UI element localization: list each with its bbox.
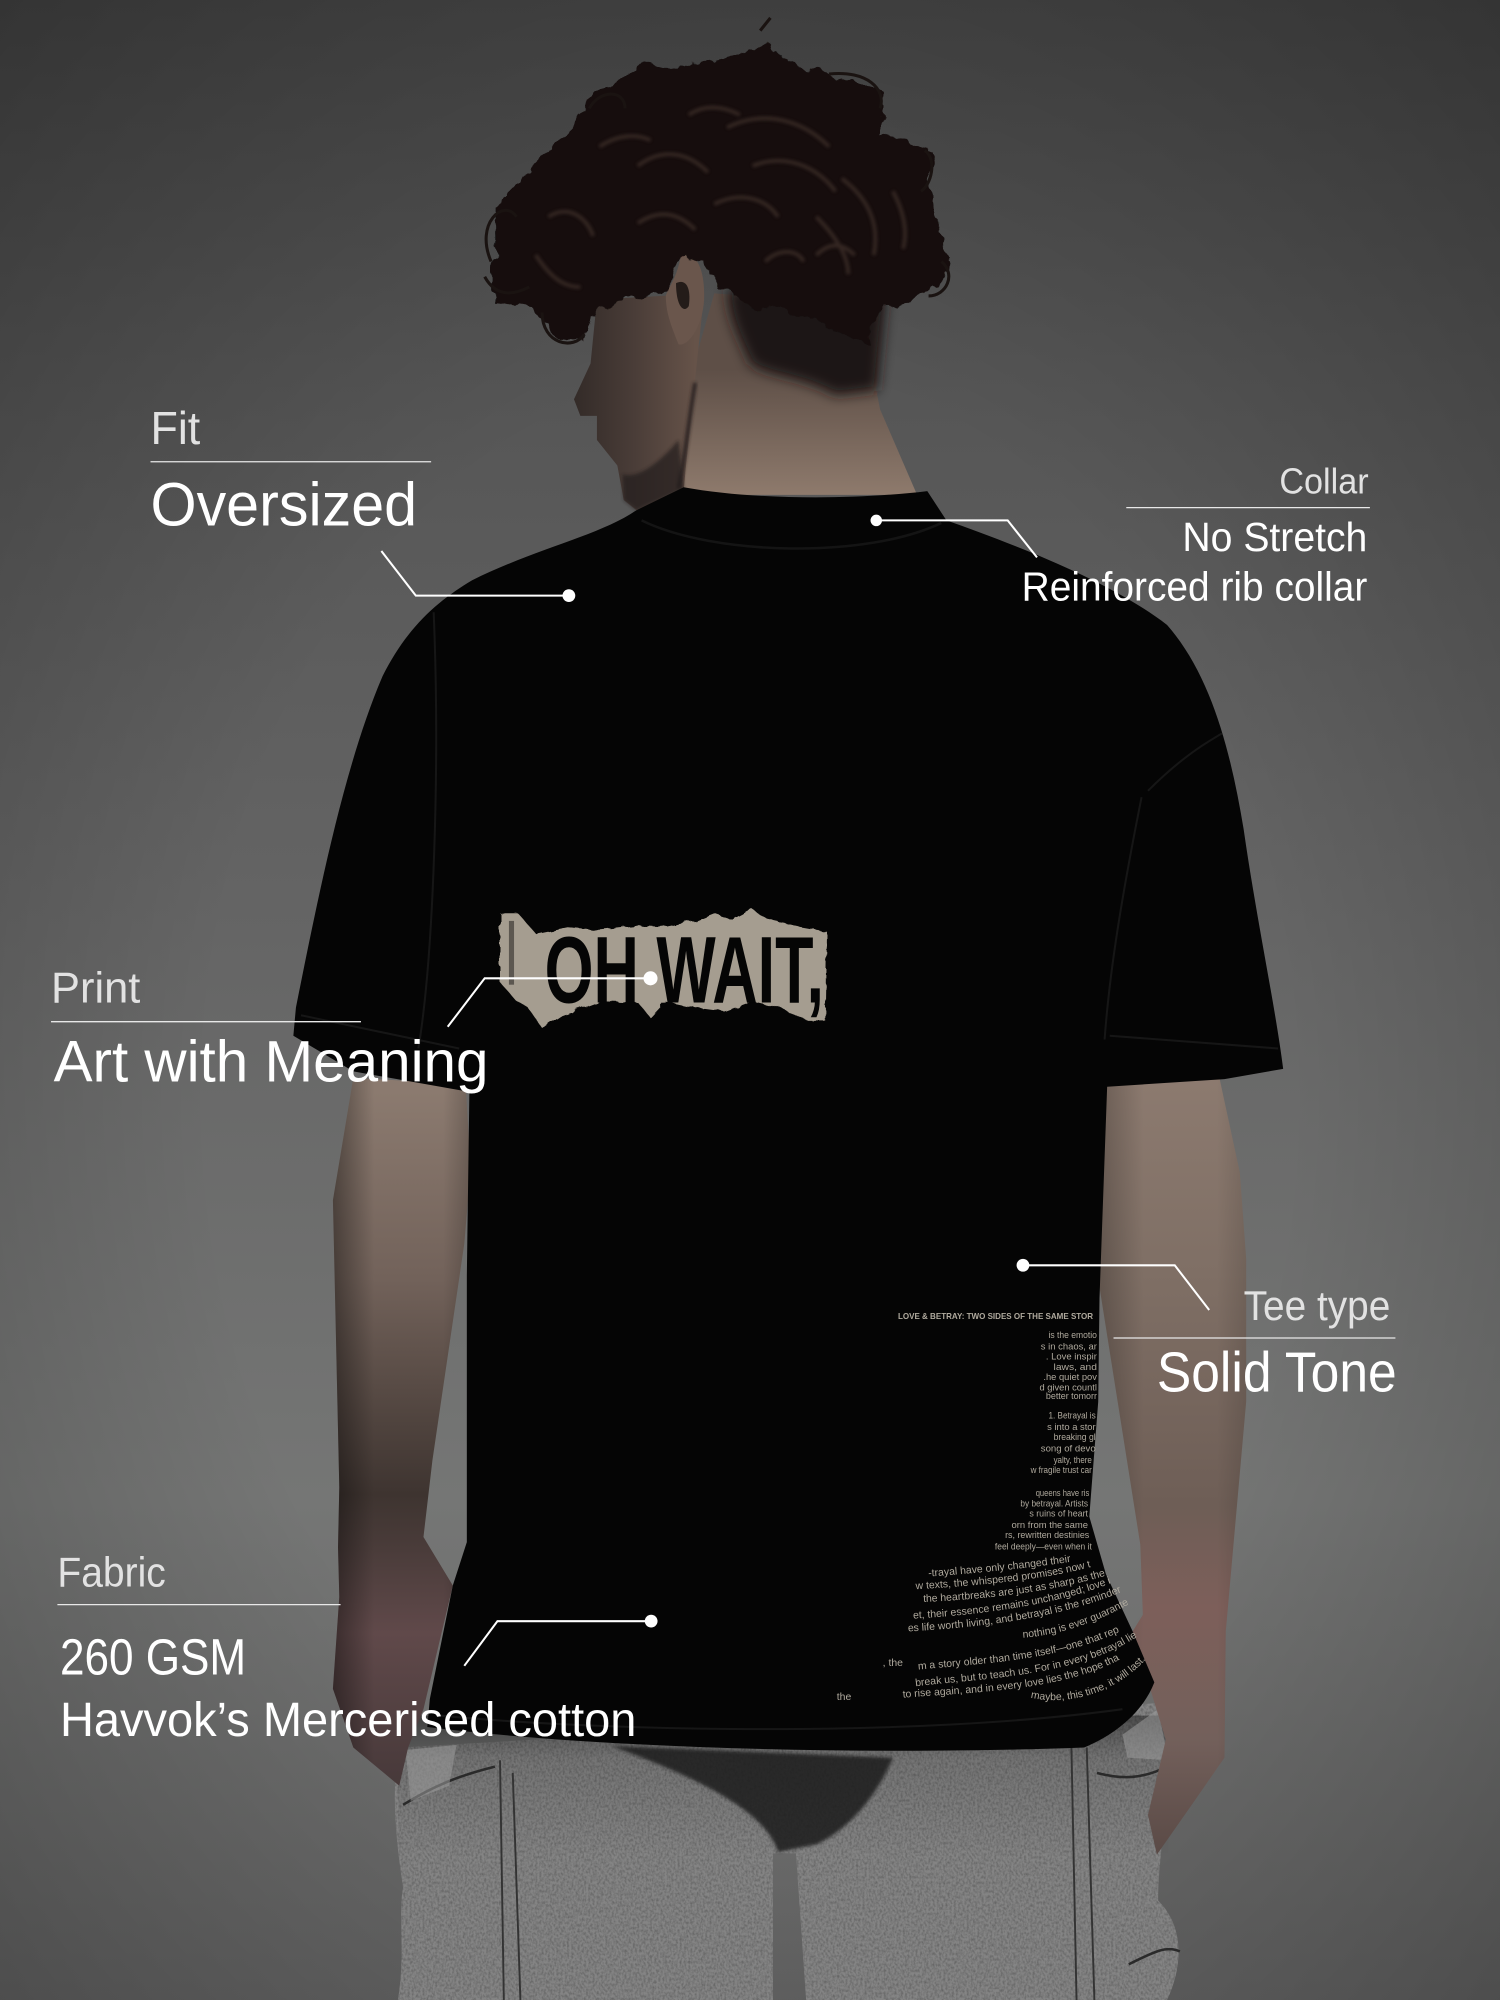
print: side story text: better tomorr — [1046, 1391, 1097, 1401]
left arm — [333, 1078, 471, 1786]
connector: fabric — [464, 1615, 658, 1666]
print: side story text — [836, 1312, 1145, 1703]
print: side story text: to rise again, and in every love lies the hope tha — [902, 1656, 1120, 1698]
print: torn paper "OH WAIT," — [500, 909, 827, 1028]
print: side story text: the heartbreaks are just as sharp as they — [923, 1571, 1104, 1602]
print: side story text: nothing is ever guarante — [1023, 1600, 1128, 1638]
print: side story text: es life worth living, and betrayal is the reminder — [908, 1587, 1120, 1632]
print: side story text: is the emotio — [1048, 1330, 1097, 1340]
print: side story text: .he quiet pov — [1043, 1372, 1097, 1382]
connector: collar — [871, 515, 1037, 557]
print: side story text: d given countl — [1040, 1382, 1097, 1392]
print: side story text: LOVE & BETRAY: TWO SIDES OF THE SAME STOR — [898, 1312, 1093, 1321]
print: side story text: queens have ris — [1036, 1488, 1090, 1498]
print: side story text: , the — [883, 1658, 903, 1669]
print: side story text: rs, rewritten destinies — [1005, 1530, 1090, 1540]
label: tee type: Tee type — [1244, 1282, 1390, 1329]
print: side story text: s ruins of heart — [1029, 1509, 1089, 1519]
print: side story text: breaking gl — [1054, 1432, 1096, 1442]
undercut hair — [727, 287, 886, 395]
print: side story text: laws, and — [1054, 1362, 1097, 1372]
connector: tee type — [1017, 1259, 1209, 1310]
callout: fit — [151, 402, 575, 602]
print: side story text: orn from the same — [1011, 1520, 1088, 1530]
t-shirt — [293, 487, 1283, 1751]
label: collar: Collar — [1279, 462, 1369, 502]
print: side story text: song of devo — [1041, 1444, 1096, 1454]
value: reinforced rib collar: Reinforced rib collar — [1022, 564, 1367, 610]
print: side story text: w texts, the whispered promises now t — [915, 1560, 1091, 1590]
value: art with meaning: Art with Meaning — [54, 1030, 489, 1095]
print: side story text: 1. Betrayal is — [1048, 1410, 1096, 1420]
right arm — [1099, 1078, 1246, 1855]
callout: tee type — [1017, 1259, 1397, 1404]
callout: collar — [871, 462, 1370, 610]
trousers — [395, 1703, 1180, 2000]
neck and face — [574, 254, 917, 510]
print: side story text: maybe, this time, it will last. — [1031, 1658, 1145, 1702]
print: side story text: yalty, there — [1054, 1455, 1092, 1465]
print: side story text: s into a stor — [1047, 1422, 1096, 1432]
callout: print — [51, 965, 658, 1095]
print: side story text: . Love inspir — [1046, 1352, 1097, 1362]
print: side story text: the — [837, 1692, 851, 1703]
value: solid tone: Solid Tone — [1157, 1341, 1397, 1404]
print: side story text: m a story older than time itself—one that rep — [918, 1628, 1118, 1670]
label: fit: Fit — [151, 402, 200, 454]
print: side story text: s in chaos, ar — [1041, 1341, 1097, 1351]
print: side story text: et, their essence remains unchanged; love i — [914, 1576, 1110, 1620]
value: oversized: Oversized — [151, 471, 417, 539]
print: side story text: feel deeply—even when it — [995, 1542, 1092, 1552]
print: side story text: -trayal have only changed their — [928, 1554, 1070, 1578]
label: fabric: Fabric — [57, 1549, 166, 1596]
print: side story text: w fragile trust car — [1030, 1465, 1092, 1475]
value: 260 gsm: 260 GSM — [60, 1629, 246, 1686]
label: print: Print — [51, 965, 140, 1013]
connector: fit — [381, 551, 575, 602]
hair — [459, 0, 949, 344]
value: mercerised cotton: Havvok’s Mercerised cotton — [60, 1693, 636, 1747]
connector: print — [448, 971, 658, 1027]
value: no stretch: No Stretch — [1182, 514, 1367, 560]
print: side story text: break us, but to teach us. For in every betrayal lie — [916, 1633, 1136, 1686]
callout: fabric — [57, 1549, 658, 1747]
print: torn paper "OH WAIT,": OH WAIT, — [545, 919, 824, 1024]
print: side story text: by betrayal. Artists — [1020, 1498, 1089, 1508]
